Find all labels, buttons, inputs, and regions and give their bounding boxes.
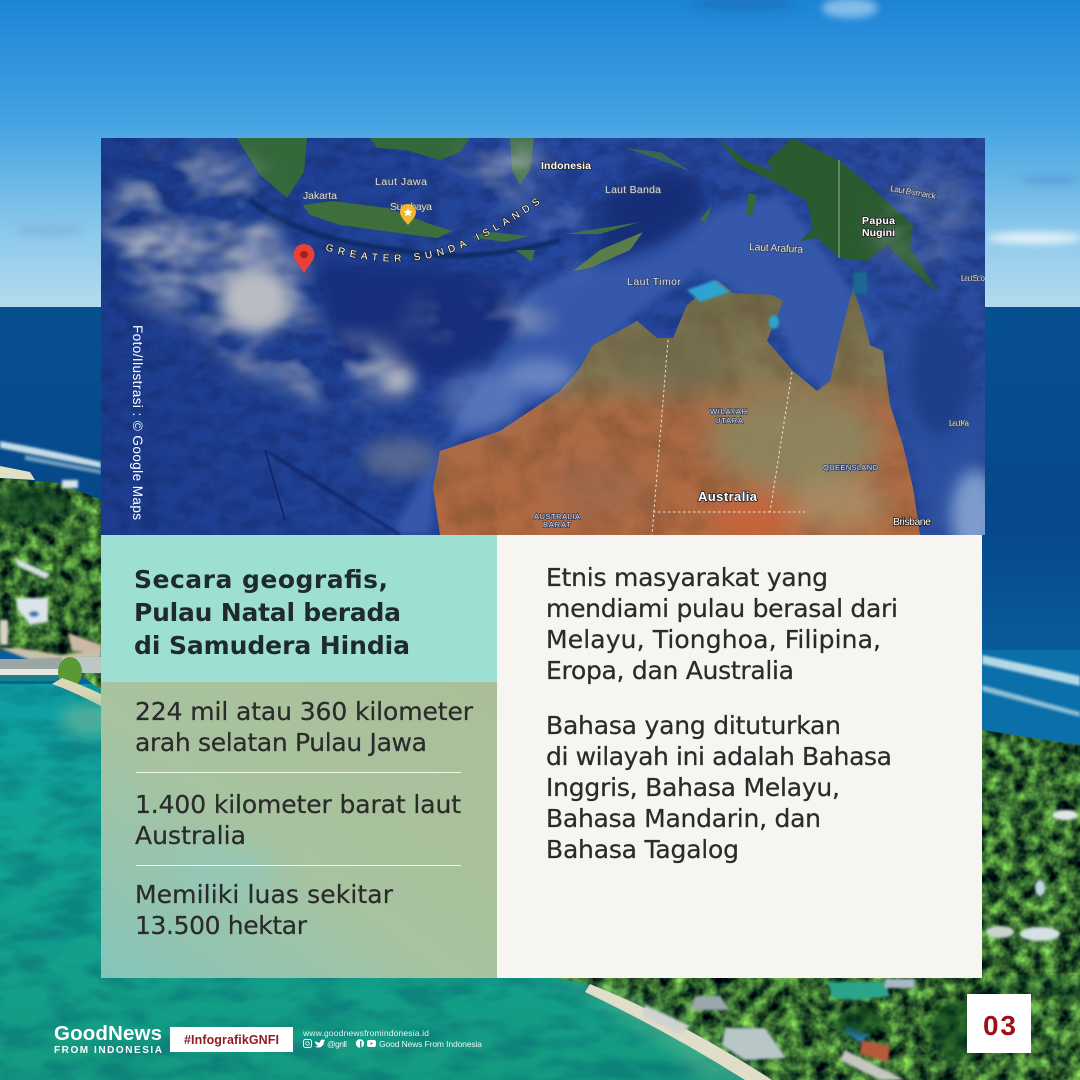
footer logo: GoodNews From Indonesia: FROM INDONESIA bbox=[54, 1045, 162, 1056]
map place labels: Nugini bbox=[862, 227, 895, 239]
hashtag badge bbox=[170, 1027, 293, 1052]
cloud cover bbox=[101, 138, 978, 486]
photo credit: Foto/Ilustrasi : © Google Maps bbox=[130, 325, 145, 520]
map place labels: Surabaya bbox=[390, 201, 432, 213]
heading text: Secara geografis, bbox=[134, 565, 388, 594]
icon: facebook bbox=[356, 1039, 364, 1048]
heading text bbox=[134, 565, 410, 660]
text: languages: Bahasa yang dituturkan bbox=[546, 711, 841, 740]
landmass: Java bbox=[303, 201, 453, 238]
text: ethnic groups: mendiami pulau berasal dari bbox=[546, 594, 898, 623]
footer contact links and social icons bbox=[302, 1028, 482, 1049]
footer logo: GoodNews From Indonesia: GoodNews bbox=[54, 1022, 162, 1045]
map place labels: Laut Jawa bbox=[375, 176, 427, 188]
footer contact links and social icons: Good News From Indonesia bbox=[379, 1039, 482, 1049]
map place labels: Laut Timor bbox=[627, 276, 682, 288]
map place labels: UTARA bbox=[715, 416, 743, 425]
fact: distance from Australia: Australia bbox=[135, 821, 246, 850]
landmass: Papua bbox=[717, 138, 940, 295]
buildings on the left shore bbox=[0, 480, 101, 660]
panel: location facts bbox=[101, 682, 497, 978]
map place labels: AUSTRALIA bbox=[534, 512, 580, 521]
map place labels: Laut Ka bbox=[949, 419, 970, 428]
fact: distance from Australia: 1.400 kilometer barat laut bbox=[135, 790, 461, 819]
heading text: Pulau Natal berada bbox=[134, 598, 401, 627]
map place labels: Brisbane bbox=[893, 516, 931, 528]
fact: distance from Java bbox=[135, 697, 474, 757]
icon: instagram bbox=[304, 1040, 312, 1048]
map place labels: Laut Arafura bbox=[749, 241, 804, 256]
hashtag badge: #InfografikGNFI bbox=[184, 1033, 279, 1047]
map place labels bbox=[302, 160, 985, 528]
panel: ethnicity and language bbox=[497, 535, 982, 978]
map place labels: Australia bbox=[698, 489, 758, 504]
map place labels: Laut Bismarck bbox=[890, 183, 937, 201]
fact: distance from Java: arah selatan Pulau Jawa bbox=[135, 728, 427, 757]
text: languages: Bahasa Tagalog bbox=[546, 835, 739, 864]
map place labels: Jakarta bbox=[303, 190, 337, 202]
panel: heading block bbox=[101, 535, 497, 682]
page number: 03 bbox=[983, 1010, 1016, 1041]
map place labels: Laut Solo bbox=[961, 274, 986, 283]
map place labels: BARAT bbox=[543, 520, 571, 529]
map place labels: QUEENSLAND bbox=[823, 463, 879, 472]
sea areas: shelf and deep water bbox=[101, 138, 999, 560]
page number bbox=[967, 994, 1031, 1053]
text: languages: Bahasa Mandarin, dan bbox=[546, 804, 821, 833]
satellite map of Indonesia and Australia bbox=[101, 138, 985, 535]
map place labels: Indonesia bbox=[541, 160, 591, 172]
heading text: di Samudera Hindia bbox=[134, 631, 410, 660]
shore houses and reef details bbox=[642, 810, 1078, 1080]
text: ethnic groups bbox=[546, 563, 898, 685]
text: languages: Inggris, Bahasa Melayu, bbox=[546, 773, 840, 802]
fact: distance from Java: 224 mil atau 360 kilometer bbox=[135, 697, 474, 726]
icon: twitter bbox=[315, 1040, 325, 1048]
text: ethnic groups: Melayu, Tionghoa, Filipina, bbox=[546, 625, 881, 654]
text: languages: di wilayah ini adalah Bahasa bbox=[546, 742, 892, 771]
icon: youtube bbox=[367, 1040, 376, 1047]
map place labels: WILAYAH bbox=[710, 407, 747, 416]
landmass: Sumatra bbox=[237, 138, 307, 198]
icon: red map pin bbox=[294, 244, 314, 274]
fact: distance from Australia bbox=[135, 790, 461, 850]
text: ethnic groups: Eropa, dan Australia bbox=[546, 656, 794, 685]
fact: island area bbox=[135, 880, 394, 940]
icon: yellow map pin bbox=[400, 204, 416, 225]
landmass: Kalimantan bbox=[370, 138, 470, 160]
footer contact links and social icons: @gnfi bbox=[327, 1039, 347, 1049]
landmass: Sulawesi and eastern islands bbox=[470, 138, 757, 271]
map place labels: Laut Banda bbox=[605, 184, 661, 196]
footer contact links and social icons: www.goodnewsfromindonesia.id bbox=[302, 1028, 429, 1038]
footer logo: GoodNews From Indonesia bbox=[54, 1022, 162, 1056]
map place labels: GREATER SUNDA ISLANDS bbox=[326, 198, 540, 262]
pier building bbox=[0, 657, 101, 687]
text: ethnic groups: Etnis masyarakat yang bbox=[546, 563, 828, 592]
fact: island area: Memiliki luas sekitar bbox=[135, 880, 394, 909]
fact: island area: 13.500 hektar bbox=[135, 911, 308, 940]
text: languages bbox=[546, 711, 892, 864]
landmass: Australia bbox=[430, 280, 925, 548]
map place labels: Papua bbox=[862, 215, 895, 227]
